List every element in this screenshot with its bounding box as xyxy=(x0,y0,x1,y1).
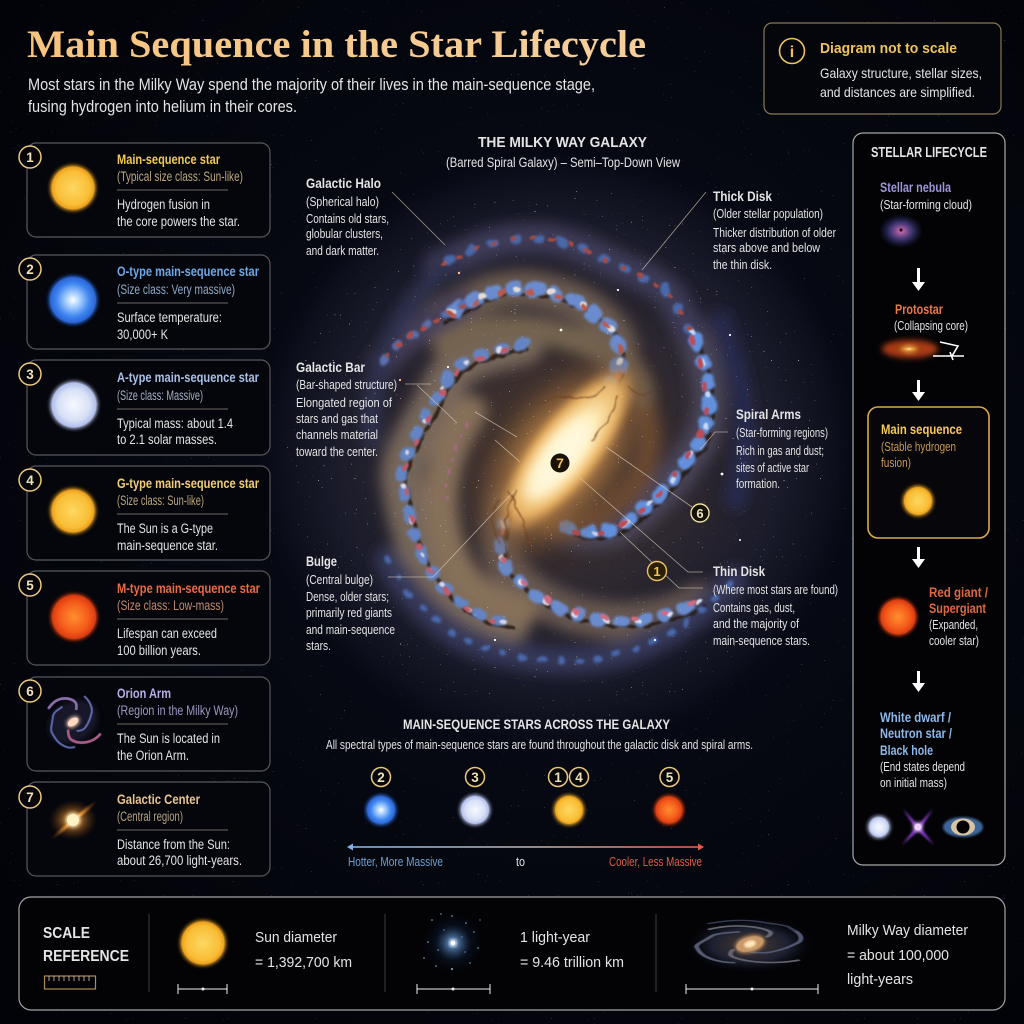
panel: star card 4 xyxy=(19,466,270,560)
dark dust edge of arms xyxy=(406,294,713,628)
red and pink nebula knots xyxy=(382,238,706,624)
subtitle xyxy=(28,75,595,116)
badge 5: 5 xyxy=(26,578,34,593)
panel: star card 5 xyxy=(19,571,270,665)
scale heading: REFERENCE xyxy=(43,948,129,965)
stage: protostar: (Collapsing core) xyxy=(894,319,968,333)
card 1 text: the core powers the star. xyxy=(117,214,240,229)
label: galactic halo: (Spherical halo) xyxy=(306,195,379,209)
badge 3 xyxy=(19,363,41,385)
label: thick disk: Thick Disk xyxy=(713,189,772,204)
label: thin disk xyxy=(713,564,838,648)
icon: M-type star xyxy=(52,595,96,639)
scale: sun: Sun diameter xyxy=(255,929,337,946)
label: bulge: Dense, older stars; xyxy=(306,590,389,604)
card 3 text: (Size class: Massive) xyxy=(117,388,203,403)
stage: end states: Black hole xyxy=(880,743,933,758)
label: spiral arms: formation. xyxy=(736,477,780,491)
panel: galactic center card 7 xyxy=(19,782,270,876)
label: bulge: stars. xyxy=(306,639,331,653)
label: spiral arms: Spiral Arms xyxy=(736,407,801,422)
row of number badges: 4 xyxy=(575,770,583,785)
subtitle: Most stars in the Milky Way spend the majority of their lives in the main-sequence stage, xyxy=(28,75,595,94)
badge 4: 4 xyxy=(26,473,34,488)
card 1 text xyxy=(117,152,243,229)
badge 5 xyxy=(19,574,41,596)
stage: end states: on initial mass) xyxy=(880,776,947,790)
arrow labels: Cooler, Less Massive xyxy=(609,855,702,869)
scale: milky way: Milky Way diameter xyxy=(847,922,968,939)
card 5 text xyxy=(117,581,261,658)
scale: sun xyxy=(178,922,352,994)
label: galactic halo: Contains old stars, xyxy=(306,212,389,226)
badge 6 xyxy=(19,680,41,702)
row of number badges: 2 xyxy=(377,770,385,785)
label: galactic bar xyxy=(296,360,397,459)
section heading: MAIN-SEQUENCE STARS ACROSS THE GALAXY xyxy=(403,717,670,732)
card 4 text: G-type main-sequence star xyxy=(117,476,260,491)
label: spiral arms: Rich in gas and dust; xyxy=(736,444,824,458)
icon: info: i xyxy=(790,44,794,61)
bright stars in disk xyxy=(399,272,741,641)
label: thick disk: stars above and below xyxy=(713,241,821,255)
card 5 text: M-type main-sequence star xyxy=(117,581,261,596)
label: bulge xyxy=(306,554,395,653)
icon: neutron star xyxy=(902,809,934,845)
panel: star card 3 xyxy=(19,360,270,455)
card 6 text: Orion Arm xyxy=(117,686,171,701)
temperature arrow xyxy=(347,844,704,850)
bar dust lanes xyxy=(492,385,650,560)
subtitle: fusing hydrogen into helium in their cores. xyxy=(28,97,297,116)
label: galactic bar: (Bar-shaped structure) xyxy=(296,378,397,392)
galaxy marker 7: 7 xyxy=(556,455,564,471)
card 3 text xyxy=(117,370,260,447)
label: galactic bar: Galactic Bar xyxy=(296,360,366,375)
card 1 text: Hydrogen fusion in xyxy=(117,197,210,212)
label: galactic bar: stars and gas that xyxy=(296,412,378,426)
panel: not to scale note xyxy=(764,23,1001,114)
label: thin disk: main-sequence stars. xyxy=(713,634,810,648)
icon: G-type star xyxy=(52,490,94,532)
badge 2 xyxy=(19,258,41,280)
galaxy marker 1: 1 xyxy=(653,564,661,579)
badge 3: 3 xyxy=(26,367,34,382)
label: galactic bar: Elongated region of xyxy=(296,396,392,410)
badge 1: 1 xyxy=(26,150,34,165)
card 6 text: The Sun is located in xyxy=(117,731,220,746)
galaxy illustration xyxy=(257,152,857,752)
badge 7: 7 xyxy=(26,790,34,805)
stage: red giant xyxy=(880,585,988,648)
arrow xyxy=(912,547,925,568)
scale heading: SCALE xyxy=(43,925,90,942)
card 7 text xyxy=(117,792,242,868)
arrow labels: Hotter, More Massive xyxy=(348,855,443,869)
card 4 text xyxy=(117,476,260,553)
scale: milky way: light-years xyxy=(847,971,913,988)
label: thin disk: and the majority of xyxy=(713,617,799,631)
card 4 text: The Sun is a G-type xyxy=(117,521,213,536)
stage: protostar: Protostar xyxy=(895,302,944,317)
card 3 text: to 2.1 solar masses. xyxy=(117,432,217,447)
note text: and distances are simplified. xyxy=(820,84,975,100)
stage: main sequence highlight: fusion) xyxy=(881,456,911,470)
galaxy marker 6: 6 xyxy=(696,506,704,521)
bright clump cores xyxy=(402,289,709,622)
note text xyxy=(820,65,982,100)
scale: light-year: 1 light-year xyxy=(520,929,590,946)
panel: star card 2 xyxy=(19,255,270,349)
label: spiral arms: sites of active star xyxy=(736,461,809,475)
card 7 text: Distance from the Sun: xyxy=(117,837,230,852)
card 1 text: Main-sequence star xyxy=(117,152,221,167)
row of number badges: 1 xyxy=(554,770,562,785)
card 7 text: (Central region) xyxy=(117,809,183,824)
label: galactic halo: Galactic Halo xyxy=(306,176,381,191)
label: bulge: Bulge xyxy=(306,554,337,569)
card 5 text: (Size class: Low-mass) xyxy=(117,598,224,613)
card 7 text: Galactic Center xyxy=(117,792,201,807)
blue star-forming clumps xyxy=(382,238,735,660)
card 2 text: 30,000+ K xyxy=(117,327,168,342)
label: galactic halo: and dark matter. xyxy=(306,244,379,258)
stage: end states: Neutron star / xyxy=(880,726,952,741)
badge 1 xyxy=(19,146,41,168)
row of number badges: 3 xyxy=(471,770,479,785)
stage: end states: White dwarf / xyxy=(880,710,951,725)
label: thick disk: the thin disk. xyxy=(713,258,772,272)
label: thin disk: Thin Disk xyxy=(713,564,765,579)
panel: star card 1 xyxy=(19,143,270,237)
galaxy marker 6 xyxy=(691,504,709,522)
panel: stellar lifecycle xyxy=(853,133,1005,865)
badge 6: 6 xyxy=(26,684,34,699)
stage: end states: (End states depend xyxy=(880,760,965,774)
label: thick disk xyxy=(713,189,836,272)
card 6 text: the Orion Arm. xyxy=(117,748,189,763)
stage: red giant: (Expanded, xyxy=(929,618,978,632)
label: bulge: primarily red giants xyxy=(306,606,392,620)
stage: main sequence highlight: Main sequence xyxy=(881,421,962,437)
card 2 text: Surface temperature: xyxy=(117,310,222,325)
arrow labels: to xyxy=(516,855,525,869)
section text: All spectral types of main-sequence stars are found throughout the galactic disk and spiral arms. xyxy=(326,738,753,752)
scale: milky way: = about 100,000 xyxy=(847,947,949,964)
stage: stellar nebula: Stellar nebula xyxy=(880,180,951,195)
badge 4 xyxy=(19,469,41,491)
card 2 text: (Size class: Very massive) xyxy=(117,282,235,297)
label: galactic halo: globular clusters, xyxy=(306,227,383,241)
galaxy marker 1 xyxy=(648,562,666,580)
icon: white dwarf xyxy=(869,817,889,837)
leader lines xyxy=(388,192,728,588)
label: thick disk: Thicker distribution of older xyxy=(713,226,836,240)
soft arm bands xyxy=(371,238,745,660)
card 5 text: 100 billion years. xyxy=(117,643,201,658)
stage: stellar nebula: (Star-forming cloud) xyxy=(880,198,972,212)
stage: red giant: cooler star) xyxy=(929,634,979,648)
icon: info xyxy=(780,38,804,64)
galactic bar xyxy=(424,311,698,605)
card 3 text: Typical mass: about 1.4 xyxy=(117,416,233,431)
card 2 text xyxy=(117,264,260,342)
arrow xyxy=(912,671,925,692)
label: thin disk: (Where most stars are found) xyxy=(713,583,838,597)
stage: stellar nebula xyxy=(879,180,972,248)
stage: protostar xyxy=(882,302,968,360)
label: bulge: (Central bulge) xyxy=(306,573,373,587)
stage: main sequence highlight: (Stable hydrogen xyxy=(881,440,956,454)
card 5 text: Lifespan can exceed xyxy=(117,626,217,641)
card 6 text: (Region in the Milky Way) xyxy=(117,703,238,718)
label: galactic bar: toward the center. xyxy=(296,445,378,459)
galaxy heading: (Barred Spiral Galaxy) – Semi–Top-Down View xyxy=(446,155,680,170)
card 7 text: about 26,700 light-years. xyxy=(117,853,242,868)
label: galactic bar: channels material xyxy=(296,428,378,442)
arrow xyxy=(912,268,925,291)
icon: ruler xyxy=(44,976,96,989)
galaxy heading xyxy=(446,134,680,170)
section: main-sequence stars across the galaxy xyxy=(326,717,753,869)
note heading: Diagram not to scale xyxy=(820,40,957,57)
card 4 text: (Size class: Sun-like) xyxy=(117,493,204,508)
row of number badges xyxy=(372,768,679,786)
label: thick disk: (Older stellar population) xyxy=(713,207,823,221)
scale heading xyxy=(43,925,129,965)
row of number badges: 5 xyxy=(666,770,674,785)
icon: sun-like star xyxy=(52,166,94,210)
card 4 text: main-sequence star. xyxy=(117,538,218,553)
icon: galactic center glow xyxy=(48,798,100,842)
stage: end states xyxy=(869,710,983,845)
scale: light-year: = 9.46 trillion km xyxy=(520,954,624,971)
row of stars xyxy=(367,796,682,824)
arrow xyxy=(912,380,925,401)
icon: small spiral galaxy xyxy=(40,690,106,753)
panel: scale reference xyxy=(19,897,1005,1010)
badge 7 xyxy=(19,786,41,808)
title: Main Sequence in the Star Lifecycle xyxy=(27,23,646,66)
badge 2: 2 xyxy=(26,262,34,277)
label: galactic halo xyxy=(306,176,389,258)
panel: orion arm card 6 xyxy=(19,677,270,771)
galaxy marker 7 xyxy=(550,454,570,472)
galaxy heading: THE MILKY WAY GALAXY xyxy=(478,134,647,151)
card 1 text: (Typical size class: Sun-like) xyxy=(117,169,243,184)
stage: main sequence highlight xyxy=(868,407,989,538)
scale: light-year xyxy=(417,913,624,994)
note text: Galaxy structure, stellar sizes, xyxy=(820,65,982,81)
stage: red giant: Supergiant xyxy=(929,601,986,616)
icon: O-type star xyxy=(50,277,96,323)
icon: A-type star xyxy=(52,382,96,428)
label: bulge: and main-sequence xyxy=(306,623,395,637)
lifecycle heading: STELLAR LIFECYCLE xyxy=(871,145,987,161)
icon: black hole xyxy=(943,817,983,837)
arrow labels xyxy=(348,855,702,869)
scale: milky way xyxy=(686,917,968,994)
scale: sun: = 1,392,700 km xyxy=(255,954,352,971)
label: spiral arms xyxy=(736,407,828,491)
stage: red giant: Red giant / xyxy=(929,585,988,600)
card 3 text: A-type main-sequence star xyxy=(117,370,260,385)
card 2 text: O-type main-sequence star xyxy=(117,264,260,279)
label: spiral arms: (Star-forming regions) xyxy=(736,426,828,440)
card 6 text xyxy=(117,686,238,763)
label: thin disk: Contains gas, dust, xyxy=(713,601,795,615)
